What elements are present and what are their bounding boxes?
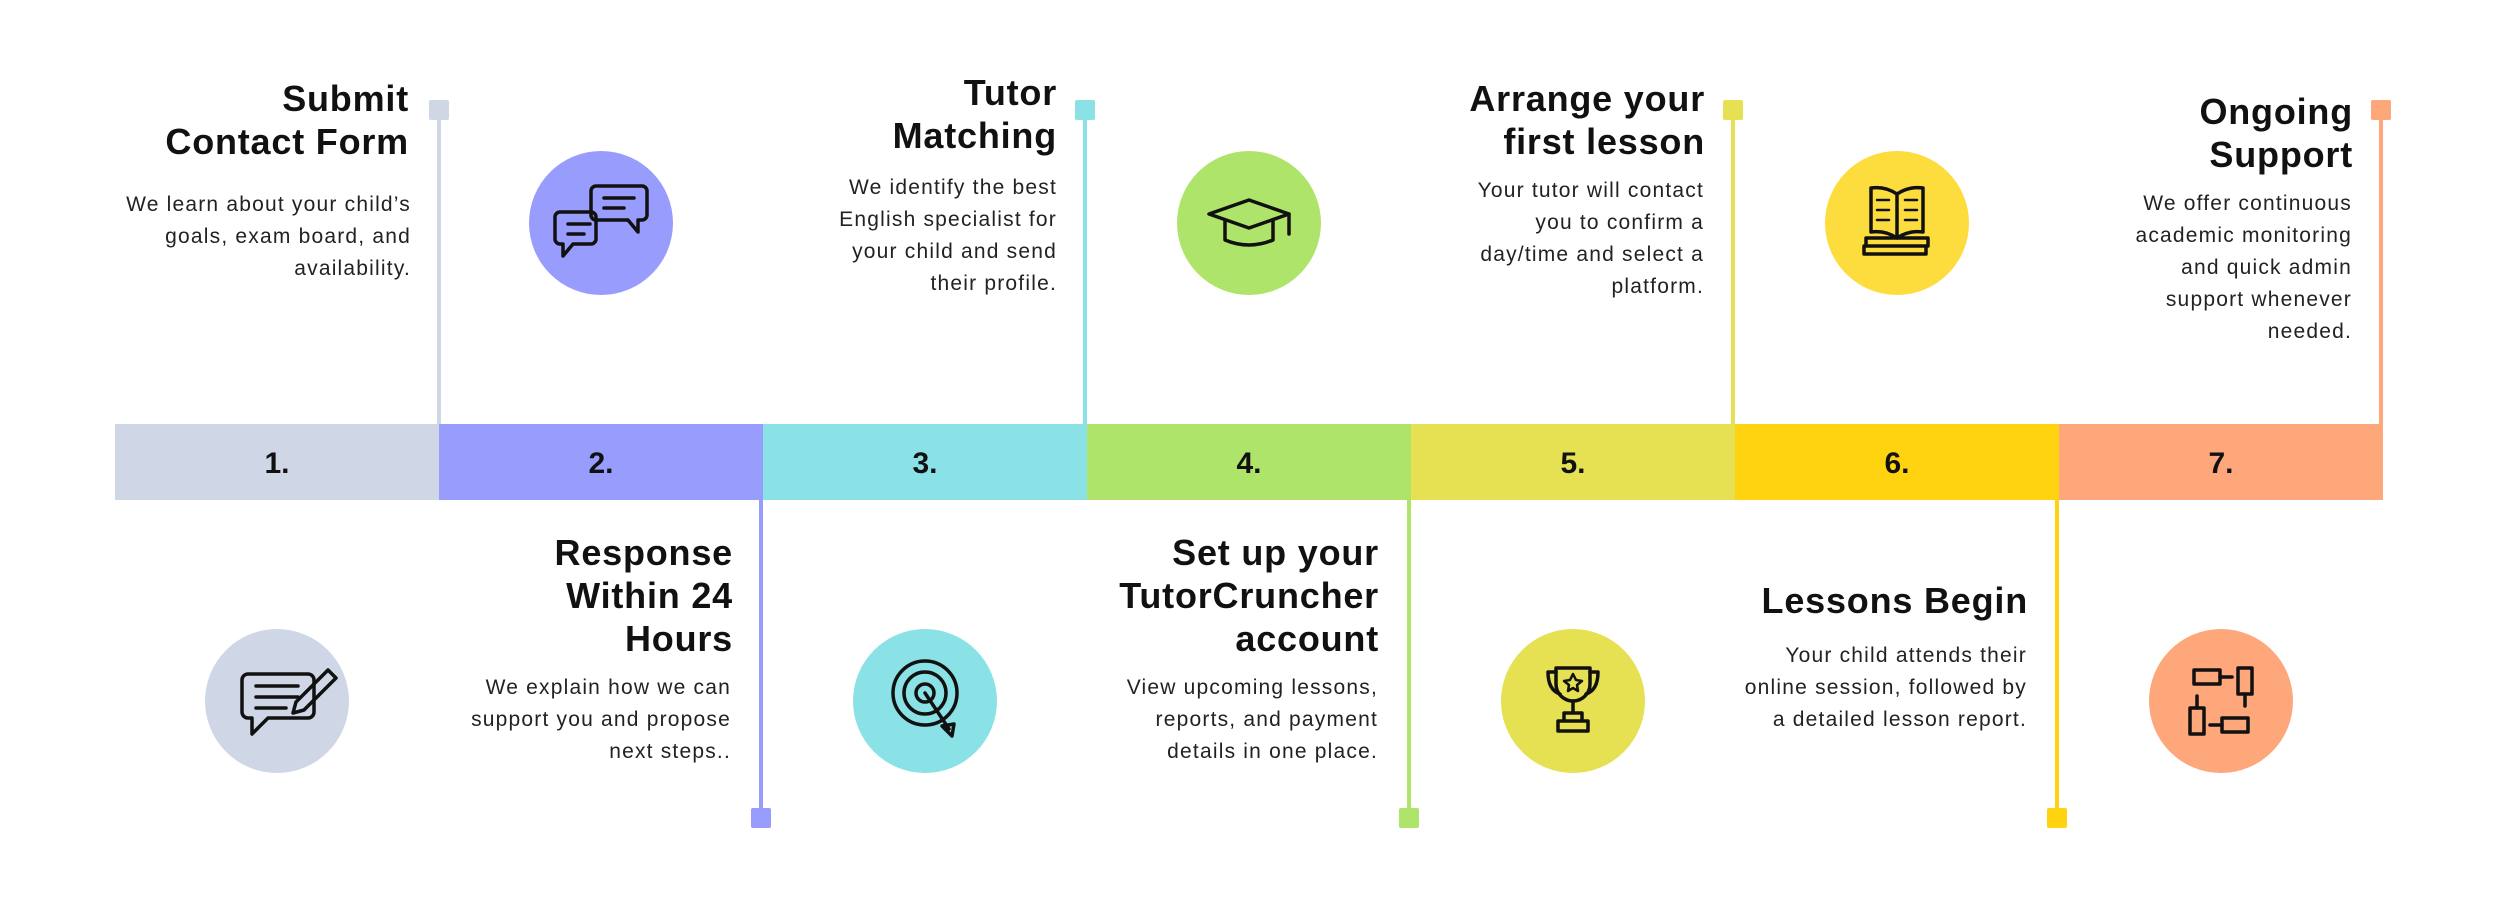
step 2 text: Hours: [625, 618, 733, 659]
icon: hands: [2149, 629, 2293, 773]
step 3 text: English specialist for: [839, 208, 1057, 231]
step 1 text: goals, exam board, and: [165, 225, 411, 248]
step 3 text: We identify the best: [849, 176, 1057, 199]
step 3 text: your child and send: [852, 240, 1057, 263]
step 6 text: online session, followed by: [1745, 676, 2027, 699]
step 1 text: Contact Form: [165, 121, 409, 162]
step 7 text: We offer continuous: [2143, 192, 2352, 215]
timeline bar: [115, 424, 2383, 500]
step 4 text: reports, and payment: [1156, 708, 1378, 731]
step 1 text: availability.: [294, 257, 411, 280]
step 2 text: support you and propose: [471, 708, 731, 731]
step 1 text: We learn about your child’s: [126, 193, 411, 216]
step 5 text: first lesson: [1503, 121, 1705, 162]
icon: trophy: [1501, 629, 1645, 773]
step 2 text: Within 24: [566, 575, 733, 616]
step 4 text: details in one place.: [1167, 740, 1378, 763]
step 4 text: View upcoming lessons,: [1127, 676, 1378, 699]
step 4 text: account: [1235, 618, 1379, 659]
step 1 text: [126, 78, 411, 280]
timeline bar: 1.: [264, 447, 290, 480]
step 2 text: We explain how we can: [486, 676, 731, 699]
step 3 text: their profile.: [930, 272, 1057, 295]
step 5 text: [1469, 78, 1705, 298]
step 7 text: Support: [2209, 134, 2353, 175]
timeline bar: 3.: [912, 447, 938, 480]
step 6 text: Your child attends their: [1785, 644, 2027, 667]
connector 6: [2047, 500, 2067, 828]
timeline bar: 4.: [1236, 447, 1262, 480]
step 7 text: support whenever: [2166, 288, 2352, 311]
icon: book: [1825, 151, 1969, 295]
step 6 text: a detailed lesson report.: [1773, 708, 2027, 731]
timeline bar: 7.: [2208, 447, 2234, 480]
timeline bar: 6.: [1884, 447, 1910, 480]
connector 2: [751, 500, 771, 828]
step 3 text: [839, 72, 1057, 295]
connector 3: [1075, 100, 1095, 424]
step 3 text: Tutor: [964, 72, 1057, 113]
step 2 text: Response: [555, 532, 733, 573]
step 7 text: Ongoing: [2199, 91, 2353, 132]
step 2 text: next steps..: [609, 740, 731, 763]
step 5 text: day/time and select a: [1480, 243, 1704, 266]
step 7 text: needed.: [2268, 320, 2352, 343]
connector 4: [1399, 500, 1419, 828]
step 2 text: [471, 532, 733, 763]
connector 1: [429, 100, 449, 424]
step 7 text: academic monitoring: [2135, 224, 2352, 247]
connector 5: [1723, 100, 1743, 424]
step 1 text: Submit: [282, 78, 409, 119]
step 4 text: Set up your: [1172, 532, 1379, 573]
timeline bar: 2.: [588, 447, 614, 480]
icon: chat bubbles: [529, 151, 673, 295]
step 7 text: and quick admin: [2181, 256, 2352, 279]
icon: message with pencil: [205, 629, 349, 773]
step 5 text: Your tutor will contact: [1478, 179, 1704, 202]
step 5 text: platform.: [1612, 275, 1704, 298]
timeline bar: 5.: [1560, 447, 1586, 480]
step 7 text: [2135, 91, 2353, 343]
step 4 text: [1119, 532, 1379, 763]
step 4 text: TutorCruncher: [1119, 575, 1379, 616]
step 5 text: you to confirm a: [1535, 211, 1704, 234]
icon: target: [853, 629, 997, 773]
step 5 text: Arrange your: [1469, 78, 1705, 119]
icon: graduation cap: [1177, 151, 1321, 295]
step 6 text: Lessons Begin: [1762, 580, 2028, 621]
connector 7: [2371, 100, 2391, 424]
step 6 text: [1745, 580, 2028, 731]
step 3 text: Matching: [893, 115, 1057, 156]
